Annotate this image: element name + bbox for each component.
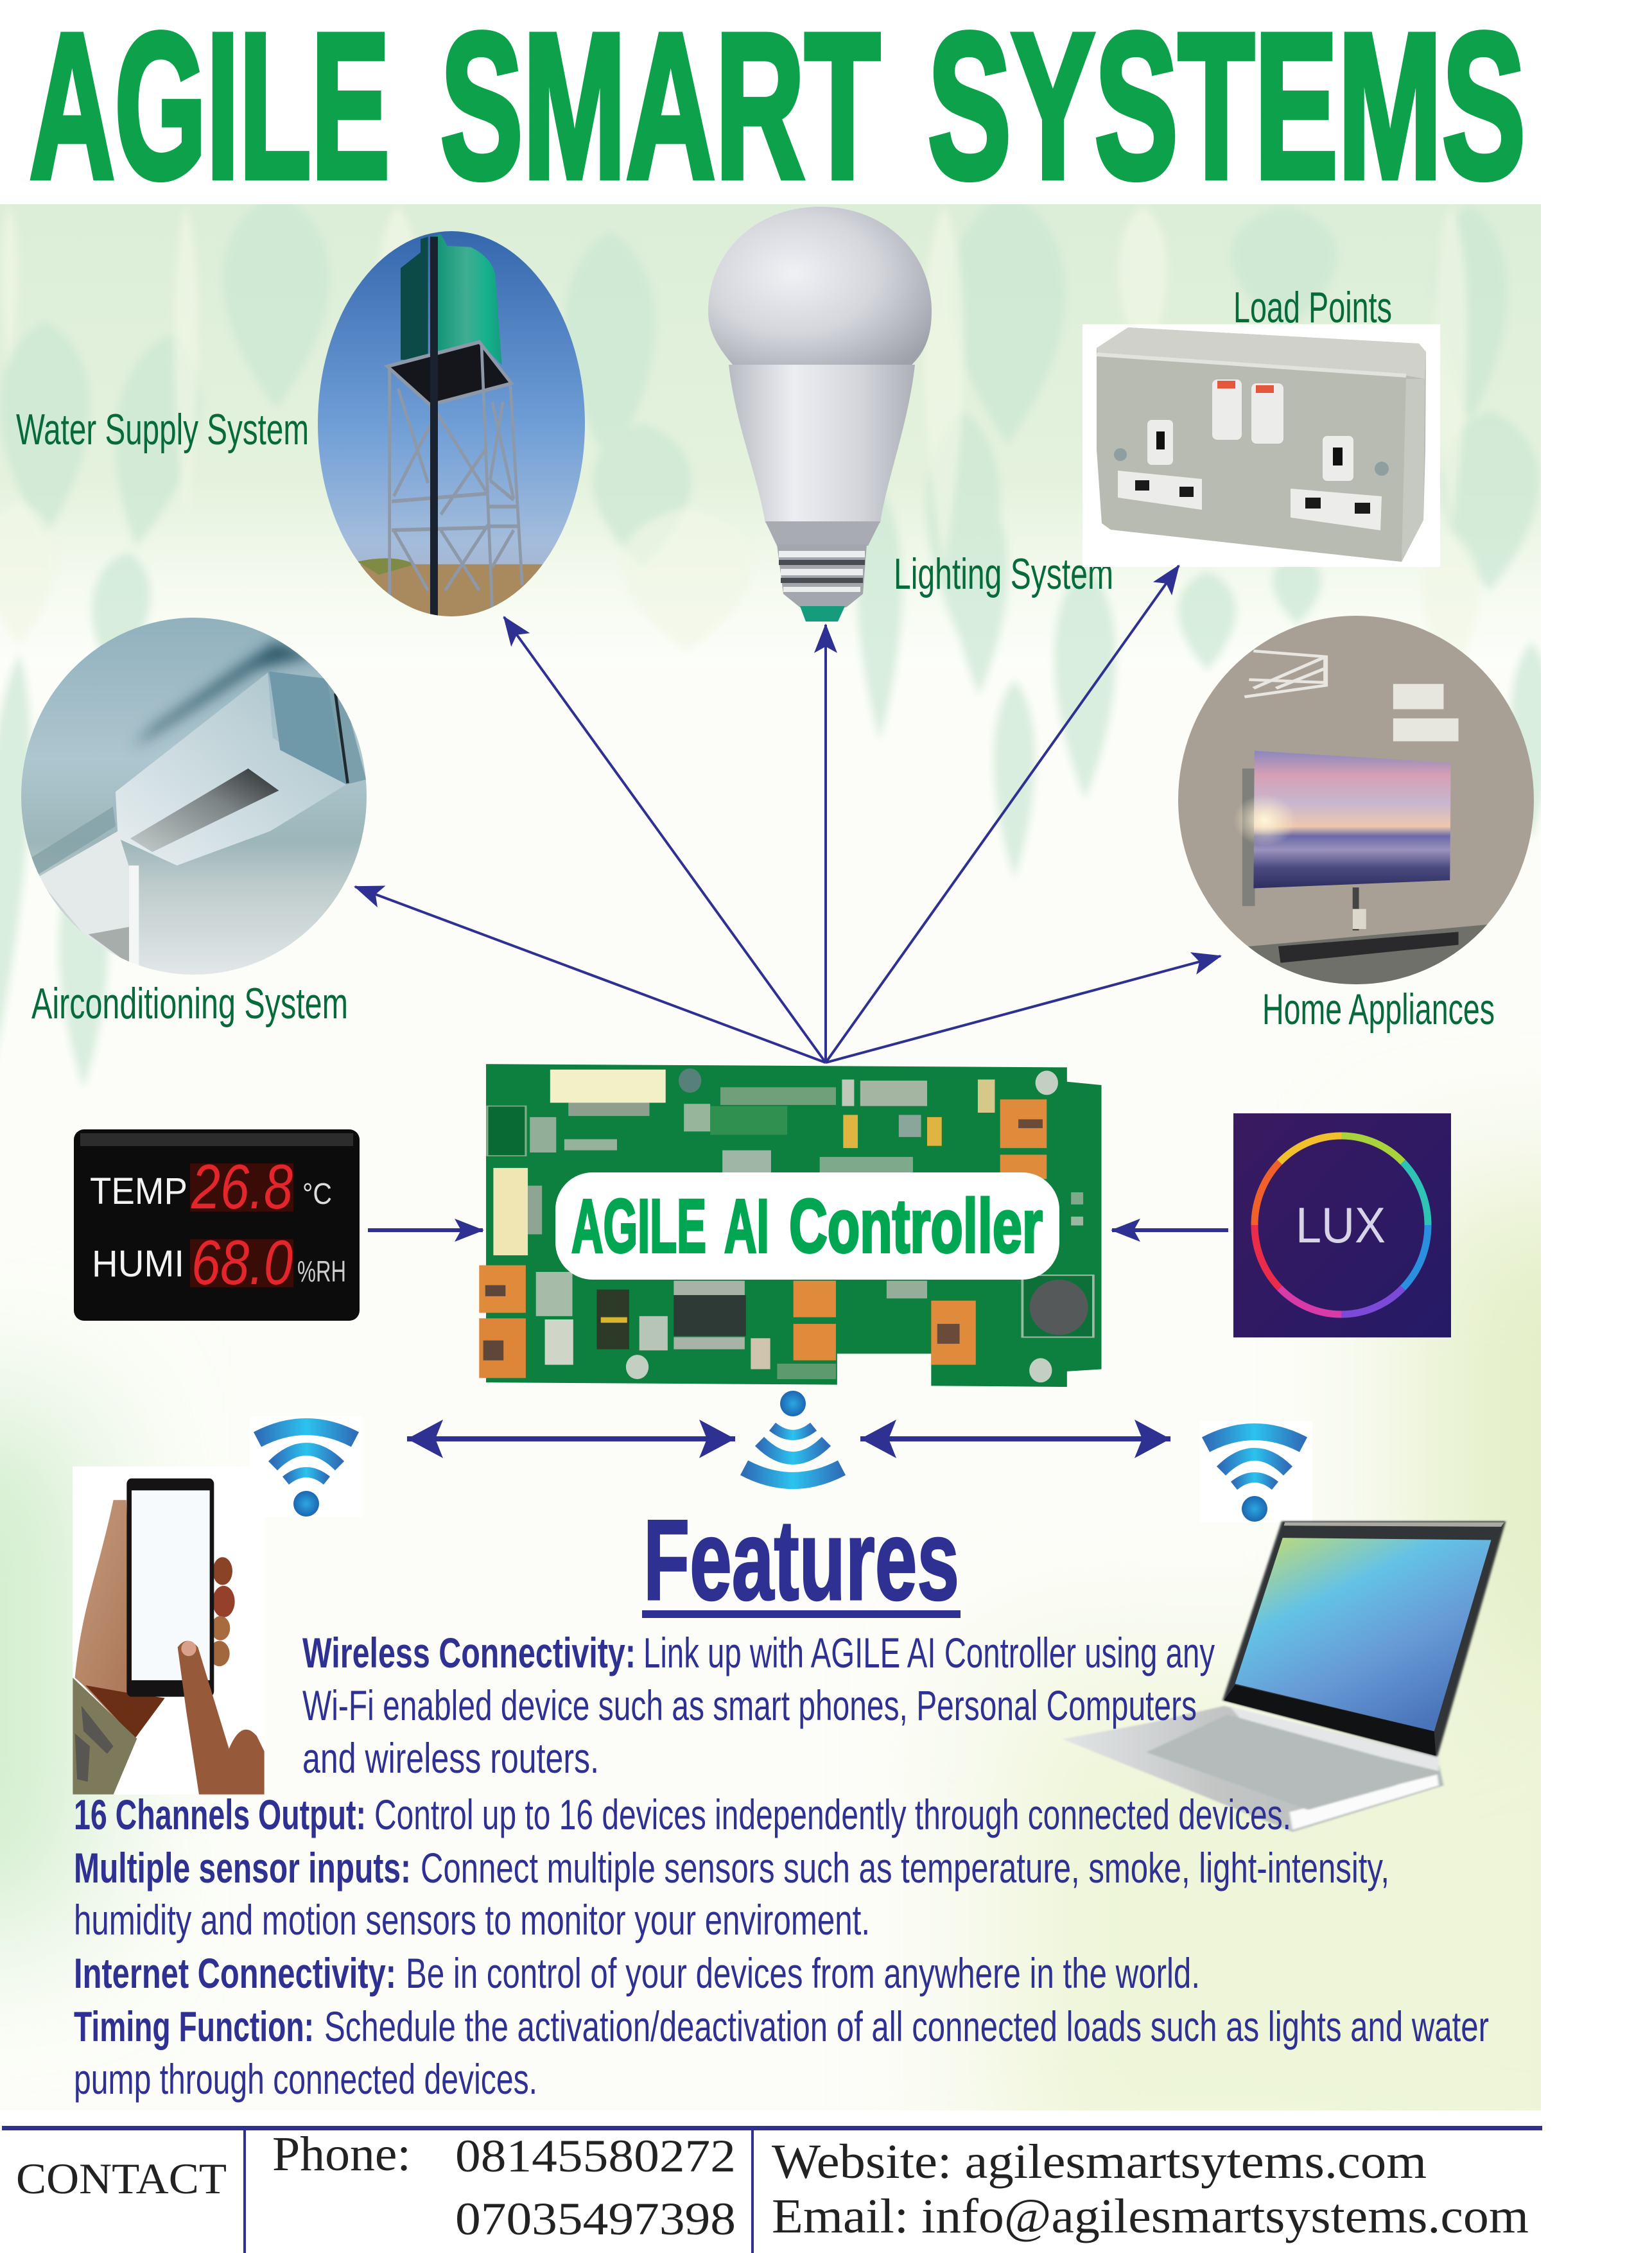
label: airconditioning system: Airconditioning System — [31, 979, 348, 1028]
panel: temperature and humidity display: %RH — [297, 1255, 346, 1288]
text: wireless connectivity — [302, 1629, 1215, 1782]
arrows: controller to outputs — [355, 566, 1221, 1063]
website and email: Website: agilesmartsytems.com — [772, 2135, 1427, 2189]
phone numbers — [272, 2127, 736, 2245]
label: home appliances: Home Appliances — [1262, 985, 1495, 1034]
text: internet connectivity: Be in control of your devices from anywhere in the world. — [406, 1949, 1200, 1997]
panel: temperature and humidity display: °C — [302, 1177, 332, 1210]
text: 16 channels output — [74, 1791, 1291, 1838]
panel: LUX sensor tile — [1233, 1113, 1451, 1337]
image: hand holding phone — [73, 1466, 265, 1795]
contact heading: CONTACT — [16, 2154, 227, 2203]
controller title: AI — [724, 1184, 769, 1269]
text: wireless connectivity: and wireless routers. — [302, 1734, 599, 1782]
phone numbers: Phone: — [272, 2127, 411, 2181]
panel: temperature and humidity display: 68.0 — [191, 1227, 293, 1298]
text: multiple sensor inputs — [74, 1844, 1389, 1944]
text: wireless connectivity: Wi-Fi enabled device such as smart phones, Personal Computers — [302, 1682, 1197, 1729]
text: multiple sensor inputs: humidity and motion sensors to monitor your enviroment. — [74, 1896, 870, 1944]
phone numbers: 08145580272 — [455, 2130, 736, 2182]
label: load points: Load Points — [1233, 283, 1392, 332]
background panel with leaves — [0, 204, 1541, 2110]
text: 16 channels output: Control up to 16 devices independently through connected devices. — [374, 1791, 1291, 1838]
phone numbers: 07035497398 — [455, 2193, 736, 2245]
text: timing function: pump through connected devices. — [74, 2055, 537, 2103]
text: multiple sensor inputs: Multiple sensor inputs: — [74, 1844, 411, 1892]
icon: wifi centre — [744, 1391, 842, 1481]
icon: wifi right — [1200, 1421, 1312, 1522]
controller title: Controller — [789, 1184, 1043, 1269]
panel: temperature and humidity display: 26.8 — [191, 1151, 293, 1222]
icon: wifi left — [250, 1416, 362, 1517]
panel: AI controller board — [479, 1064, 1102, 1387]
label: lighting system: Lighting System — [894, 550, 1113, 598]
text: wireless connectivity: Wireless Connectivity: — [302, 1629, 636, 1676]
image: laptop — [1063, 1521, 1506, 1832]
panel: temperature and humidity display: TEMP — [90, 1170, 187, 1212]
heading: Features — [642, 1496, 961, 1624]
text: wireless connectivity: Link up with AGILE AI Controller using any — [643, 1629, 1215, 1676]
controller title: AGILE — [571, 1184, 706, 1269]
image: television on wall — [1175, 613, 1538, 989]
panel: LUX sensor tile: LUX — [1296, 1197, 1386, 1253]
website and email — [772, 2135, 1529, 2243]
panel: temperature and humidity display: HUMI — [92, 1243, 184, 1285]
image: wall socket — [1082, 324, 1440, 567]
text: internet connectivity — [74, 1949, 1200, 1997]
label: water supply system: Water Supply System — [16, 405, 309, 454]
text: 16 channels output: 16 Channels Output: — [74, 1791, 366, 1838]
image: water tower — [318, 231, 585, 616]
panel: contact — [2, 2126, 1542, 2253]
title — [30, 0, 1526, 222]
image: air conditioner — [15, 610, 378, 984]
text: internet connectivity: Internet Connectivity: — [74, 1949, 396, 1997]
heading: Features: Features — [643, 1496, 959, 1624]
website and email: Email: info@agilesmartsystems.com — [772, 2189, 1529, 2243]
arrow: sensor to controller — [368, 1228, 483, 1232]
controller label pill — [555, 1172, 1059, 1280]
arrow: phone to controller wifi — [407, 1436, 735, 1441]
text: timing function: Timing Function: — [74, 2003, 314, 2050]
arrow: lux to controller — [1112, 1228, 1228, 1232]
image: light bulb — [708, 207, 932, 622]
controller title — [571, 1184, 1043, 1269]
arrow: laptop to controller wifi — [860, 1436, 1170, 1441]
text: timing function — [74, 2003, 1489, 2103]
panel: temperature and humidity display — [74, 1129, 360, 1321]
